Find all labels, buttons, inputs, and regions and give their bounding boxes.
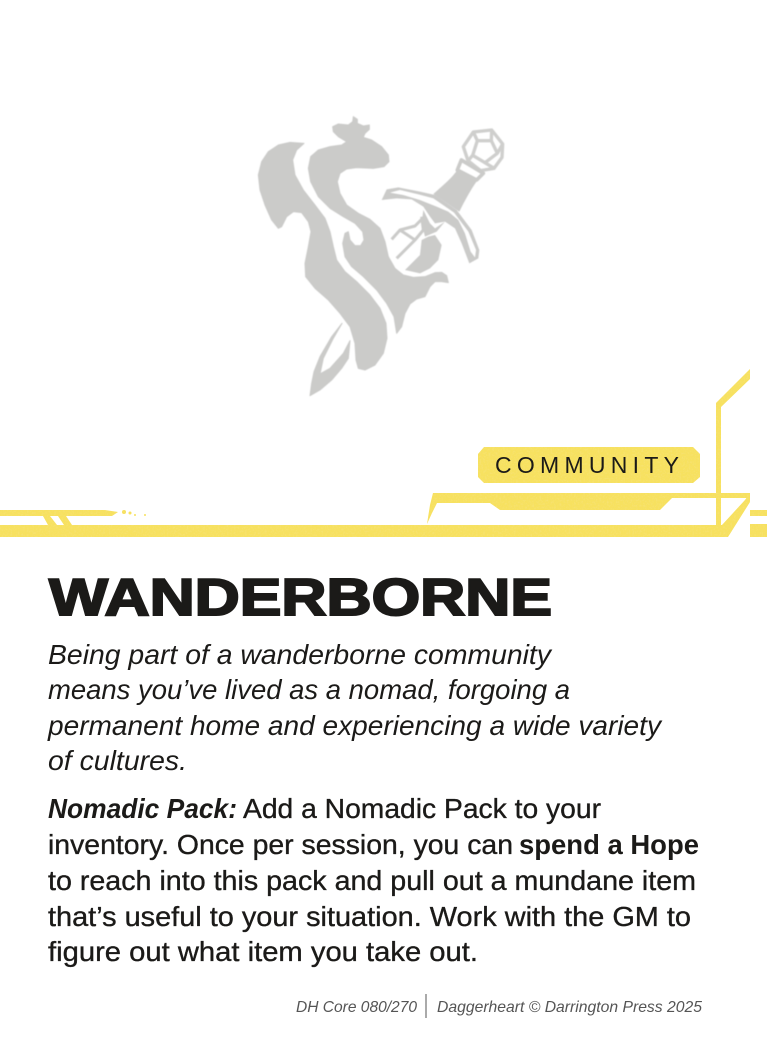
flavor text: Being part of a wanderborne community [48,639,553,670]
feature text: inventory. Once per session, you can [48,829,513,860]
sword guard and blade [382,187,479,273]
decorative gold frame [0,369,767,537]
feature text: that’s useful to your situation. Work with the GM to [48,901,691,932]
right frame line [716,369,750,525]
feature text: spend a Hope [519,829,699,860]
emblem: flowing banner shapes [258,117,448,396]
community badge [478,447,700,483]
badge label: COMMUNITY [495,452,679,478]
sword pommel and grip [433,130,503,212]
flavor text: permanent home and experiencing a wide variety [47,710,663,741]
feature text: Add a Nomadic Pack to your [243,793,601,824]
icon: wanderborne emblem with sword [258,117,503,396]
title: WANDERBORNE [49,569,552,627]
badge shape [478,447,700,483]
footer credits: Daggerheart © Darrington Press 2025 [437,999,702,1016]
footer credits: DH Core 080/270 [296,999,417,1016]
flavor text: means you’ve lived as a nomad, forgoing a [48,674,570,705]
feature text: to reach into this pack and pull out a mundane item [48,865,696,896]
left strip and struts [0,510,118,525]
left speckles [122,510,146,516]
feature text: Nomadic Pack: [48,793,237,824]
feature text: figure out what item you take out. [48,936,478,967]
footer credits [296,994,702,1018]
upper right strip [427,493,750,524]
flavor text: of cultures. [48,745,187,776]
right edge stubs [750,510,767,537]
feature text [48,793,699,967]
flavor text [47,639,663,776]
main gold bar [0,493,750,537]
